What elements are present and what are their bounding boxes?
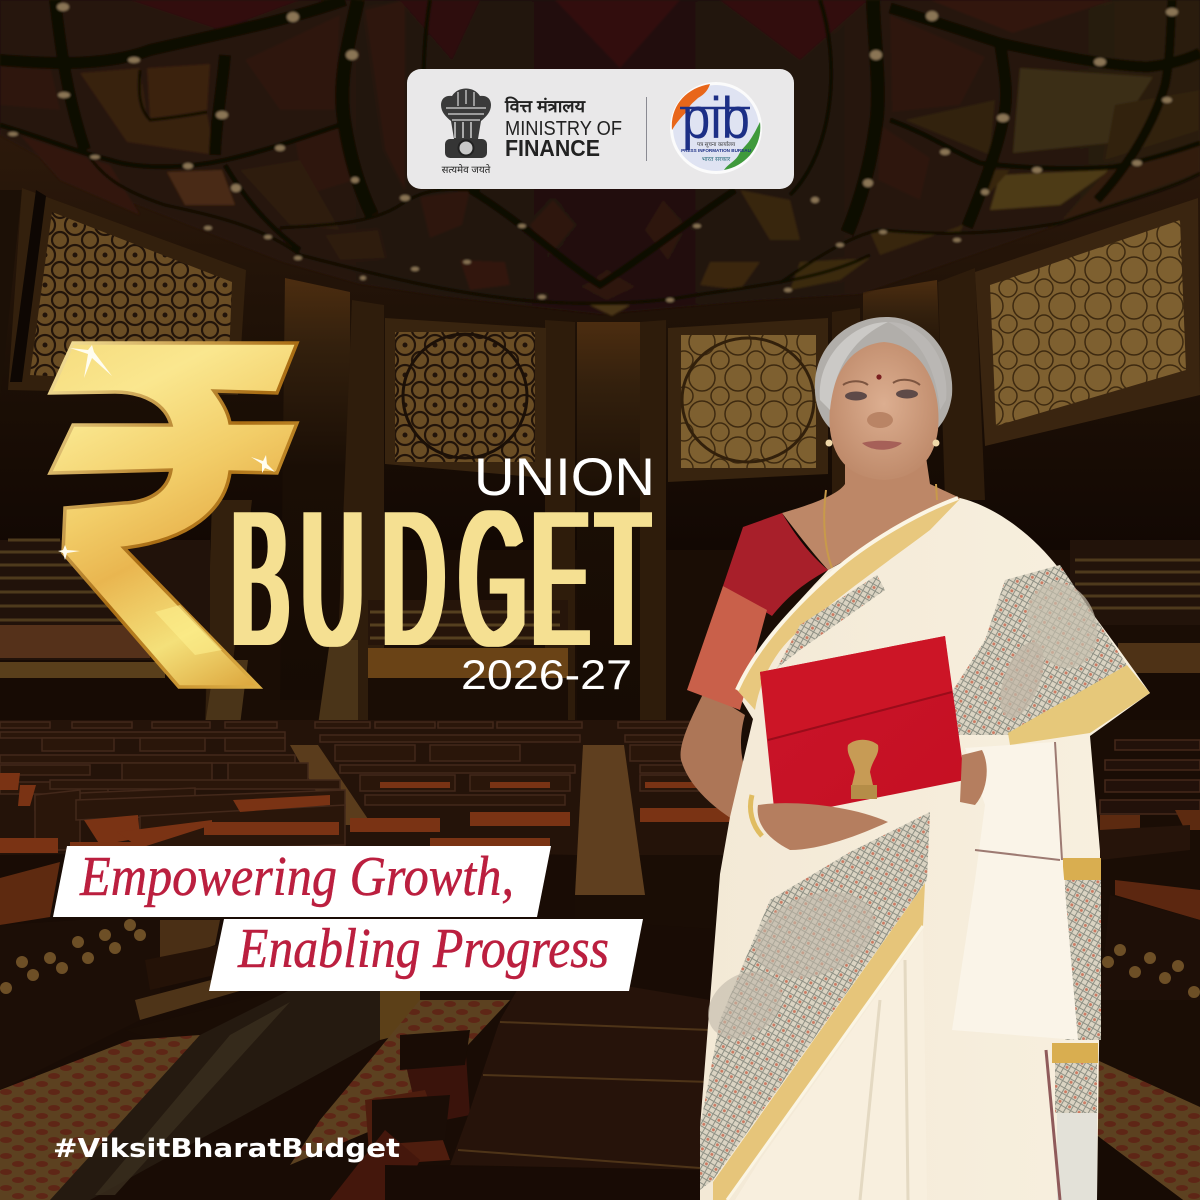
balcony seating (0, 540, 1200, 723)
seating rows (0, 720, 735, 895)
pattern: lower saree band (700, 812, 930, 1190)
right saree panels (1052, 858, 1101, 1200)
icon: national emblem (441, 88, 491, 176)
blouse (723, 513, 828, 616)
ornamental panels (8, 188, 1200, 482)
face features (826, 374, 940, 450)
red folder (760, 636, 965, 818)
icon: gold rupee symbol (50, 343, 297, 687)
head (815, 317, 952, 480)
icon: PIB logo (670, 82, 762, 174)
tagline banners: Empowering Growth, (79, 846, 514, 908)
icon: PIB logo: pib (682, 86, 750, 151)
pattern: shoulder fish panel (950, 565, 1127, 735)
arm (681, 690, 890, 845)
shawl (952, 742, 1078, 1040)
tagline banners (53, 846, 643, 991)
right side benches (1090, 720, 1200, 1200)
ministry wordmark (504, 96, 622, 161)
title: Union Budget 2026-27: BUDGET (232, 470, 649, 686)
title: Union Budget 2026-27: UNION (474, 448, 655, 507)
ceiling (0, 0, 1200, 316)
tagline banners: Enabling Progress (237, 918, 609, 980)
ceiling lights (8, 3, 1178, 302)
icon: PIB logo: PRESS INFORMATION BUREAU (681, 148, 752, 153)
walls and pillars (0, 130, 1200, 730)
saree body (700, 498, 1150, 1200)
neck and chest (782, 450, 960, 570)
hashtag: #ViksitBharatBudget (53, 1134, 400, 1164)
hands (758, 803, 888, 850)
icon: gold emblem (848, 740, 878, 799)
ministry wordmark: FINANCE (505, 135, 600, 161)
ministry wordmark: वित्त मंत्रालय (504, 96, 586, 116)
ceiling petals (0, 0, 1200, 316)
ministry wordmark: MINISTRY OF (505, 118, 622, 140)
logo card (407, 69, 794, 189)
lower saree pleats (735, 930, 927, 1200)
icon: national emblem: सत्यमेव जयते (442, 164, 491, 176)
icon: PIB logo: पत्र सूचना कार्यालय (697, 141, 736, 148)
gold strap border (737, 499, 960, 710)
lower chamber floor (0, 850, 730, 1200)
title: Union Budget 2026-27: 2026-27 (461, 651, 632, 698)
figure: woman in cream saree holding red budget folder (681, 317, 1150, 1200)
sparkles (58, 345, 275, 560)
ceiling beams (0, 0, 1200, 303)
icon: PIB logo: भारत सरकार (702, 157, 731, 163)
